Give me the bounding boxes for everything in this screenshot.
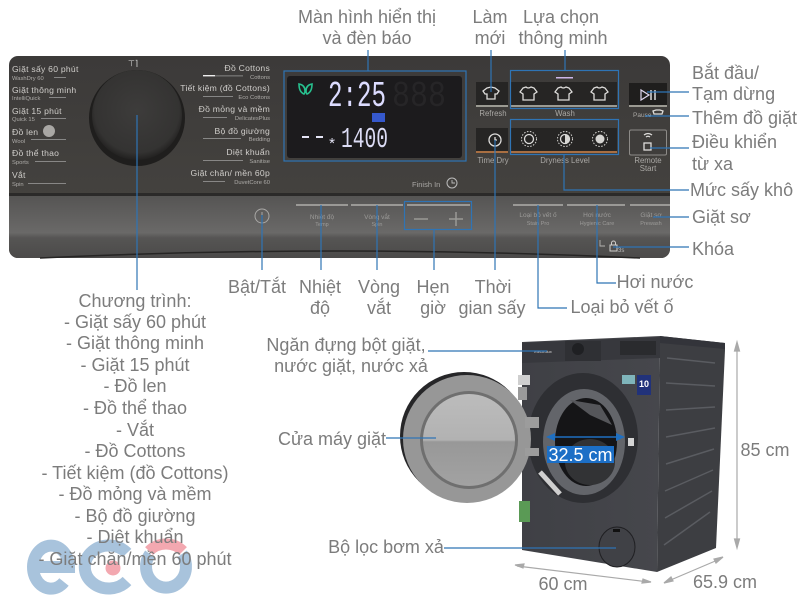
button: start pause: Pause: [633, 112, 652, 119]
label: 32.5 cm: 32.5 cm: [548, 445, 613, 465]
button: start pause: [629, 83, 667, 119]
program labels: left: Sports: [12, 160, 29, 166]
labels: right: Bắt đầu/: [692, 62, 759, 83]
labels: top: [298, 7, 608, 48]
program labels: left: Giặt sấy 60 phút: [12, 64, 79, 74]
program labels: right: Bedding: [249, 137, 270, 143]
labels: right: Tạm dừng: [692, 84, 775, 104]
labels: washer: 65.9 cm: [693, 572, 757, 592]
program list: - Giặt thông minh: [66, 333, 204, 353]
energy labels: 10: [639, 379, 649, 389]
labels: washer: Ngăn đựng bột giặt,: [266, 335, 426, 355]
button: remote start: [630, 130, 666, 173]
program labels: left: Đồ len: [12, 127, 38, 137]
display screen: 2:25: [328, 76, 386, 117]
labels: top: và đèn báo: [322, 28, 412, 48]
labels: top: Làm: [472, 7, 508, 27]
button: time dry: [476, 128, 509, 165]
icon: eco leaf: [299, 84, 312, 94]
labels: bottom of panel: Thời: [475, 277, 511, 297]
program labels: right: Giặt chăn/ mền 60p: [190, 168, 270, 178]
display screen: 1400: [341, 123, 388, 156]
machine side: [657, 336, 725, 572]
program list: Chương trình:: [79, 291, 191, 311]
buttons: dryness level: Dryness Level: [540, 156, 590, 165]
door: [400, 372, 539, 503]
program dial: [89, 59, 185, 166]
touch labels: Vòng vắt: [364, 212, 390, 221]
labels: bottom of panel: Bật/Tắt: [228, 276, 286, 297]
program labels: left: Quick 15: [12, 117, 35, 123]
drum dimension arrow: [546, 433, 625, 441]
touch labels: Nhiệt độ: [310, 214, 334, 221]
labels: washer: Cửa máy giặt: [278, 429, 386, 449]
program list: - Tiết kiệm (đồ Cottons): [41, 463, 229, 483]
labels: bottom of panel: Loại bỏ vết ố: [570, 297, 674, 317]
buttons: wash: Wash: [555, 109, 575, 118]
touch labels: [296, 204, 670, 228]
labels: right: Mức sấy khô: [690, 180, 793, 200]
labels: washer: 85 cm: [740, 440, 790, 460]
control strip: [522, 337, 660, 363]
finish in: [412, 178, 457, 189]
dimension arrows: [515, 342, 740, 583]
labels: bottom of panel: Hẹn: [416, 277, 450, 297]
program labels: right: Đồ Cottons: [224, 63, 270, 73]
washing machine: [400, 336, 725, 572]
program labels: right: Bộ đồ giường: [215, 126, 270, 136]
program list: [38, 291, 232, 569]
touch labels: Temp: [315, 222, 329, 228]
filter cover: [599, 527, 635, 567]
callout lines: washer: [386, 351, 616, 548]
labels: top: Lựa chọn: [523, 7, 599, 27]
labels: washer: Bộ lọc bơm xả: [328, 537, 445, 557]
labels: bottom of panel: [228, 272, 693, 318]
button: refresh: [476, 82, 508, 118]
buttons: dryness level: [510, 128, 617, 165]
button: remote start: Start: [640, 164, 657, 173]
button: refresh: Refresh: [479, 109, 507, 118]
touch labels: Hơi nước: [583, 212, 612, 219]
program labels: left: Vắt: [12, 170, 26, 180]
program list: - Diệt khuẩn: [86, 527, 184, 547]
callout lines: panel: [137, 50, 689, 308]
program labels: right: Eco Cottons: [238, 95, 270, 101]
program labels: left: WashDry 60: [12, 76, 44, 82]
labels: washer: 60 cm: [538, 574, 588, 594]
touch labels: Spin: [371, 222, 383, 228]
program labels: right: Sanitise: [249, 159, 270, 165]
labels: right: Khóa: [692, 239, 735, 259]
labels: top: mới: [475, 28, 505, 48]
display screen: *: [329, 135, 335, 152]
machine front: [522, 336, 660, 572]
program list: - Bộ đồ giường: [75, 506, 195, 526]
program dial: ⊤⌉: [128, 59, 138, 68]
labels: bottom of panel: gian sấy: [458, 298, 526, 318]
program list: - Đồ Cottons: [84, 441, 186, 461]
labels: right: Giặt sơ: [692, 207, 751, 227]
touch labels: Loại bỏ vết ố: [519, 210, 557, 219]
display screen: [287, 76, 462, 158]
eco logo: [33, 544, 186, 589]
energy labels: [518, 375, 651, 522]
program list: - Đồ thể thao: [83, 398, 187, 418]
labels: washer: [266, 335, 790, 594]
touch labels: Hygienic Care: [580, 221, 614, 227]
program list: - Giặt 15 phút: [80, 355, 190, 375]
program list: - Đồ len: [103, 376, 167, 396]
icon: child lock: [600, 240, 624, 254]
button: time dry: Time Dry: [477, 156, 509, 165]
touch labels: Giặt sơ: [640, 212, 662, 219]
icon: child lock: 3s: [618, 248, 624, 254]
drum opening: [528, 373, 638, 503]
program labels: right: [180, 63, 270, 186]
labels: bottom of panel: giờ: [420, 298, 446, 318]
program labels: left: Spin: [12, 182, 24, 188]
program labels: left: IntelliQuick: [12, 96, 40, 102]
touch labels: Stain Pro: [527, 221, 549, 227]
program labels: left: Wool: [12, 139, 25, 145]
labels: top: Màn hình hiển thị: [298, 7, 436, 27]
touch labels: Prewash: [640, 221, 662, 227]
program labels: right: DelicatesPlus: [235, 116, 270, 122]
panel: control panel: [9, 56, 670, 258]
button: remote start: Remote: [634, 156, 662, 165]
program labels: left: [12, 64, 79, 188]
labels: bottom of panel: Hơi nước: [617, 272, 693, 292]
labels: bottom of panel: vắt: [367, 297, 391, 318]
labels: right: Thêm đồ giặt: [692, 108, 797, 128]
control strip: Electrolux: [534, 349, 552, 354]
program labels: left: Đồ thể thao: [12, 148, 59, 158]
buttons: wash: [510, 77, 617, 118]
program labels: left: Giặt 15 phút: [12, 106, 62, 116]
labels: right: [690, 62, 797, 259]
labels: top: thông minh: [518, 28, 608, 48]
display screen: 888: [392, 76, 446, 117]
program labels: right: Đồ mỏng và mềm: [199, 104, 270, 114]
labels: bottom of panel: độ: [310, 298, 330, 318]
program list: - Vắt: [116, 419, 154, 440]
program labels: right: DuvetCore 60: [234, 180, 270, 186]
labels: right: từ xa: [692, 154, 734, 174]
icon: power: [255, 209, 269, 223]
program labels: right: Cottons: [250, 75, 270, 81]
labels: washer: nước giặt, nước xả: [274, 356, 429, 376]
program list: - Giặt chăn/mền 60 phút: [38, 549, 232, 569]
program labels: right: Diệt khuẩn: [226, 147, 270, 157]
program labels: right: Tiết kiệm (đồ Cottons): [180, 83, 270, 93]
labels: bottom of panel: Nhiệt: [299, 277, 341, 297]
labels: bottom of panel: Vòng: [358, 277, 400, 297]
program list: - Đồ mỏng và mềm: [58, 484, 212, 504]
finish in: Finish In: [412, 180, 440, 189]
labels: right: Điều khiển: [692, 132, 777, 152]
program labels: left: Giặt thông minh: [12, 85, 76, 95]
program list: - Giặt sấy 60 phút: [64, 312, 206, 332]
